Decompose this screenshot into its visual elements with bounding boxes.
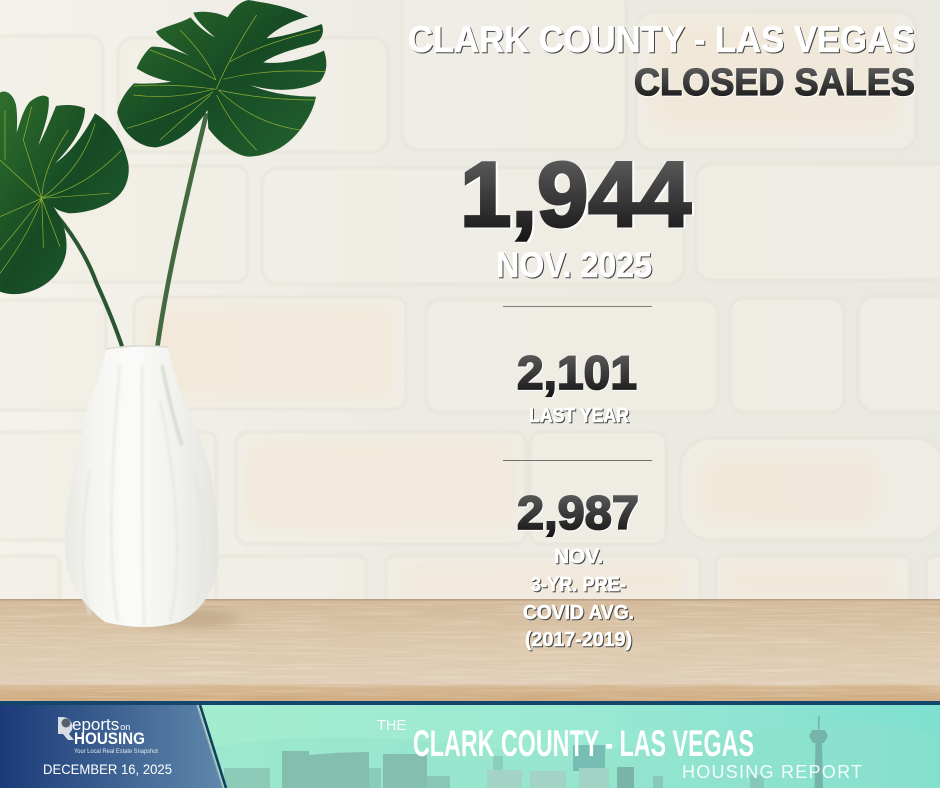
wooden table top — [0, 599, 940, 702]
plant: monstera leaves and stems — [0, 0, 326, 348]
banner text: The: THE — [377, 717, 406, 734]
vase shadow on table — [142, 609, 238, 627]
footer banner — [0, 701, 940, 788]
teal skyline panel — [197, 705, 940, 788]
heading: Closed Sales: CLOSED SALES — [634, 62, 915, 104]
Stratosphere tower — [809, 716, 828, 788]
banner text: Housing Report: HOUSING REPORT — [682, 762, 862, 782]
label: last year: LAST YEAR — [529, 405, 629, 427]
label: pre-covid average: COVID AVG. — [523, 602, 634, 624]
skyline buildings — [224, 716, 828, 788]
label: pre-covid average: NOV. — [554, 546, 603, 568]
heading: Clark County - Las Vegas: CLARK COUNTY - LAS VEGAS — [408, 19, 915, 60]
right stem — [157, 113, 207, 347]
stat: last year value: 2,101 — [517, 346, 637, 399]
left stem — [55, 213, 123, 348]
logo: Reports on Housing: eportson — [72, 715, 130, 734]
vase — [65, 346, 218, 627]
right leaf — [117, 0, 326, 157]
logo: Reports on Housing: Your Local Real Estate Snapshot — [74, 749, 158, 755]
date: DECEMBER 16, 2025 — [43, 761, 172, 777]
logo: Reports on Housing: HOUSING — [74, 729, 145, 748]
label: pre-covid average: (2017-2019) — [525, 629, 632, 651]
banner text: Clark County - Las Vegas: CLARK COUNTY - LAS VEGAS — [413, 723, 754, 764]
slanted divider — [197, 705, 223, 788]
label: pre-covid average — [523, 546, 634, 651]
footer top rule — [0, 701, 940, 705]
logo: Reports on Housing — [58, 715, 158, 755]
label: Nov. 2025: NOV. 2025 — [496, 246, 652, 285]
background: white painted brick wall — [0, 0, 940, 616]
stat: pre-covid average value: 2,987 — [517, 486, 639, 539]
main number: 1,944: 1,944 — [460, 144, 691, 246]
blue date panel — [0, 705, 223, 788]
left leaf — [0, 92, 129, 294]
label: pre-covid average: 3-YR. PRE- — [531, 574, 626, 596]
